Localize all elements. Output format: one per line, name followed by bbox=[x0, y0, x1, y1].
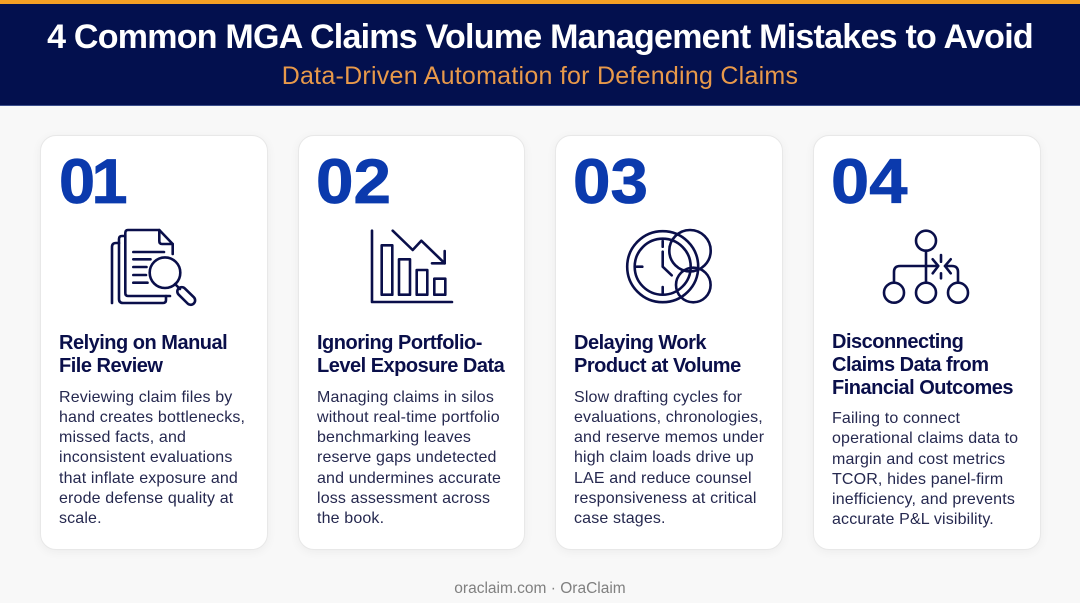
icon: documents with magnifier bbox=[112, 230, 195, 305]
panel: mistake 03 bbox=[555, 135, 783, 550]
heading: disconnecting claims data: Disconnecting Claims Data from Financial Outcomes bbox=[832, 331, 1013, 399]
icon: clock with overlapping circles bbox=[627, 230, 711, 302]
text: delaying work product: Slow drafting cycles for evaluations, chronologies, and reserve memos under high claim loads drive up LAE and reduce counsel responsiveness at critical case stages. bbox=[574, 388, 764, 527]
text: disconnecting claims data: Failing to connect operational claims data to margin and cost metrics TCOR, hides panel-firm inefficiency, and prevents accurate P&L visibility. bbox=[832, 410, 1018, 528]
panel: mistake 02 bbox=[298, 135, 525, 550]
subtitle: Data-Driven Automation for Defending Claims bbox=[282, 62, 798, 90]
number 03: 03 bbox=[573, 147, 648, 217]
number 02: 02 bbox=[316, 147, 391, 217]
heading: delaying work product: Delaying Work Product at Volume bbox=[574, 332, 741, 377]
footer source: oraclaim.com · OraClaim bbox=[454, 580, 626, 597]
number 04: 04 bbox=[831, 147, 907, 217]
icon: declining bar chart bbox=[372, 231, 452, 302]
header banner bbox=[0, 0, 1080, 106]
panel: mistake 01 bbox=[40, 135, 268, 550]
text: portfolio exposure data: Managing claims in silos without real-time portfolio benchmarking leaves reserve gaps undetected and undermines accurate loss assessment across the book. bbox=[317, 388, 501, 527]
title: 4 Common MGA Claims Volume Management Mistakes to Avoid bbox=[47, 18, 1033, 56]
number 01: 01 bbox=[59, 147, 128, 217]
icon: disconnected hierarchy bbox=[884, 231, 968, 303]
panel: mistake 04 bbox=[813, 135, 1041, 550]
heading: portfolio exposure data: Ignoring Portfolio- Level Exposure Data bbox=[317, 332, 504, 377]
text: manual file review: Reviewing claim files by hand creates bottlenecks, missed facts, and inconsistent evaluations that inflate exposure and erode defense quality at scale. bbox=[59, 388, 245, 527]
heading: manual file review: Relying on Manual File Review bbox=[59, 332, 227, 377]
